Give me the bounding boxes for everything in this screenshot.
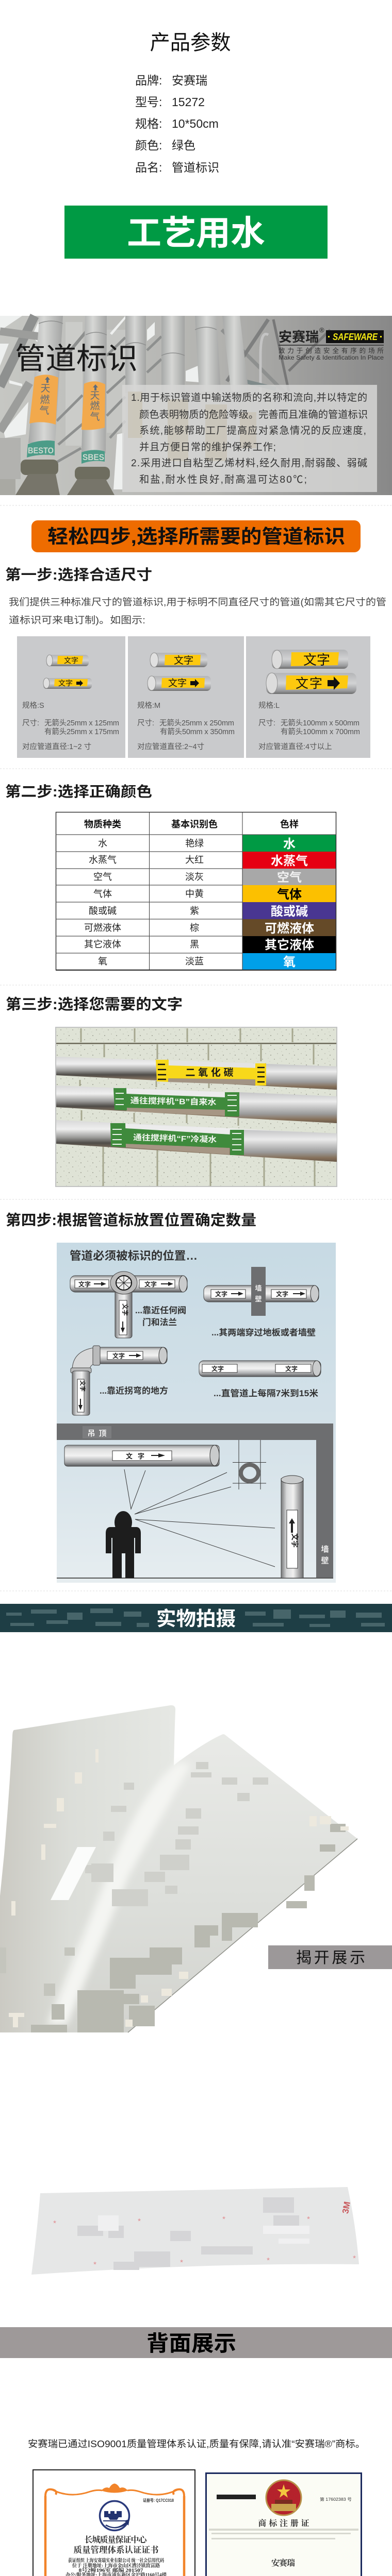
heading: product parameters: 产品参数 (150, 31, 231, 54)
section banner: back view: 背面展示 (146, 2331, 236, 2355)
valve pipe: 文字 (122, 1303, 129, 1316)
parameter list: 管道标识 (172, 161, 219, 174)
pipe M arrow (148, 676, 211, 691)
table header and rows: 紫 (190, 906, 199, 916)
panel: pipe marker banner photo: 燃 (40, 394, 50, 405)
size M specs: 尺寸: (137, 719, 154, 727)
parameter list: 颜色: (135, 139, 162, 152)
orange markers (29, 375, 105, 430)
size S specs: 有箭头25mm x 175mm (44, 727, 119, 736)
step 1 text (9, 597, 386, 625)
panel: pipe marker description: 1.用于标识管道中输送物质的名称和流向,并以特定的 (131, 392, 367, 403)
panel: size L (246, 636, 370, 758)
top pipe: 二氧化碳 (186, 1067, 233, 1078)
certificate body: 8号2幢196室 邮编 201507 (78, 2567, 143, 2573)
parameter list (135, 74, 219, 174)
pipe M plain: 文 字 (174, 655, 193, 666)
certificate body: 获证组织 上海安赛瑞实业有限公司 统一社会信用代码 (68, 2557, 164, 2564)
photo: label back: * (267, 2256, 270, 2265)
vertical pipe: 文字 (291, 1533, 299, 1548)
size L specs (258, 701, 360, 751)
parameter list: 型号: (135, 95, 162, 109)
panel: size M (128, 636, 244, 758)
pipe S arrow (43, 678, 92, 689)
trademark titles (258, 2518, 309, 2568)
photo: label back: * (93, 2260, 96, 2269)
size S specs: 无箭头25mm x 125mm (44, 718, 119, 727)
panel: pipe marker banner photo (0, 316, 392, 495)
photo: label back: * (53, 2219, 56, 2228)
swatch column: 水蒸气 (271, 854, 308, 868)
ceiling and wall frame (57, 1423, 333, 1579)
heading: step 3: 第三步:选择您需要的文字 (6, 996, 183, 1013)
ceiling and wall frame: 墙 (321, 1545, 329, 1554)
certificate number: 证册号: Q17CC018 (143, 2498, 174, 2503)
valve pipe: 文字 (78, 1280, 91, 1288)
certificate titles: 长城质量保证中心 (85, 2535, 148, 2545)
table header and rows: 水 (98, 838, 107, 849)
table header and rows: 水蒸气 (89, 855, 117, 865)
panel: pipe marker banner photo: 天 (90, 391, 100, 401)
certificate: ISO 9001 (33, 2470, 195, 2576)
table header and rows: 棕 (190, 923, 199, 933)
ceiling and wall frame: 吊 顶 (88, 1429, 106, 1438)
trademark titles: 安赛瑞 (271, 2558, 295, 2568)
table header and rows: 其它液体 (84, 939, 121, 950)
wall pipe (204, 1267, 319, 1316)
straight pipe: 文字 (211, 1365, 224, 1372)
bricks (80, 1028, 315, 1186)
vertical pipes (28, 316, 249, 453)
photo: label back: * (307, 2215, 310, 2224)
swatch column: 酸或碱 (271, 905, 308, 919)
photo: peeled label (0, 1705, 357, 2032)
brand logo: SAFEWARE: SAFEWARE (333, 332, 378, 342)
heading: four easy steps: 轻松四步,选择所需要的管道标识 (47, 526, 345, 547)
elbow pipe: 文字 (112, 1352, 125, 1360)
diagram: where pipes must be marked (57, 1243, 336, 1583)
sky gaps (0, 316, 206, 489)
certificate: trademark registration: 第 17602383 号 (320, 2497, 352, 2502)
panel: size S (17, 636, 125, 758)
lower pipe (56, 1120, 337, 1162)
brand logo: SAFEWARE: ® (319, 326, 324, 334)
middle pipe: 通往搅拌机“B”自来水 (130, 1095, 217, 1107)
straight pipe (199, 1361, 321, 1377)
struts (0, 316, 330, 462)
national emblem (266, 2480, 301, 2515)
pipe M arrow: 文 字 (168, 678, 187, 688)
camouflage print: lower, stronger (31, 1824, 346, 2032)
parameter list: 品牌: (135, 74, 162, 87)
table header and rows: 中黄 (185, 889, 204, 899)
sight lines (124, 1469, 275, 1567)
size S specs: 规格:S (22, 701, 44, 710)
valve pipe: 文字 (144, 1280, 157, 1288)
pipe L arrow: 文 字 (296, 676, 322, 691)
size S specs: 尺寸: (22, 719, 39, 727)
table header and rows: 空气 (93, 872, 112, 882)
pipe M plain (150, 653, 207, 667)
table header and rows (84, 819, 299, 967)
caption wall: ...其两端穿过地板或者墙壁 (211, 1327, 316, 1337)
table header and rows: 气体 (93, 889, 112, 899)
table header and rows: 淡蓝 (185, 956, 204, 967)
teal bands (27, 440, 105, 464)
photo: label back: 3M (340, 2201, 352, 2214)
swatch column (242, 835, 336, 970)
section banner: actual photos: 实物拍摄 (156, 1608, 236, 1630)
brand logo: SAFEWARE: Make Safety & Identification In Place (279, 354, 384, 361)
valve pipe (70, 1272, 187, 1338)
panel: pipe marker banner photo: 气 (39, 405, 50, 416)
parameter list: 安赛瑞 (172, 74, 207, 87)
fold highlight (47, 1762, 191, 2025)
size L specs: 有箭头100mm x 700mm (281, 727, 360, 736)
size L specs: 尺寸: (258, 719, 275, 727)
panel: pipe marker description: 系统,能够帮助工厂提高应对紧急情况的反应速度, (139, 425, 366, 436)
flanges (21, 460, 110, 480)
parameter list: 绿色 (172, 139, 195, 152)
table header and rows: 淡灰 (185, 872, 204, 882)
parameter list: 规格: (135, 117, 162, 130)
size S specs (22, 701, 119, 751)
heading: step 2: 第二步:选择正确颜色 (5, 784, 152, 800)
pipe S plain: 文 字 (64, 656, 78, 665)
photo: labelled pipes on brick wall (56, 1027, 337, 1187)
faint scope text (209, 2529, 358, 2539)
size S specs: 对应管道直径:1~2 寸 (22, 742, 91, 751)
size L specs: 对应管道直径:4寸以上 (258, 742, 332, 751)
table header and rows: 大红 (185, 855, 204, 865)
table header and rows: 可燃液体 (84, 923, 121, 933)
caption elbow: ...靠近拐弯的地方 (100, 1385, 168, 1396)
table header and rows: 色样 (280, 819, 299, 829)
certificate body (61, 2557, 167, 2576)
size M specs: 有箭头50mm x 350mm (160, 727, 235, 736)
pipe cross-section (233, 1440, 266, 1489)
swatch column: 其它液体 (265, 938, 314, 952)
size L specs: 规格:L (258, 701, 280, 710)
lower pipe: 通往搅拌机“F”冷凝水 (133, 1132, 217, 1144)
certifier logo (100, 2501, 129, 2531)
panel: pipe marker description: 并且方便日常的维护保养工作; (139, 442, 276, 453)
green product label: process water: 工艺用水 (127, 214, 265, 252)
top pipe (56, 1057, 337, 1090)
parameter list: 15272 (172, 95, 205, 109)
brand logo: SAFEWARE (279, 326, 384, 361)
elbow pipe (71, 1346, 167, 1415)
pipe S arrow: 文 字 (58, 679, 73, 687)
section banner: actual photos (0, 1604, 392, 1632)
table header and rows: 酸或碱 (89, 906, 117, 916)
wall pipe: 文字 (215, 1290, 227, 1298)
size L specs: 无箭头100mm x 500mm (281, 718, 360, 727)
camouflage print: upper, faint (85, 1762, 315, 1906)
straight pipe: 文字 (285, 1365, 298, 1372)
heading: step 1: 第一步:选择合适尺寸 (5, 567, 152, 583)
banner title: 管道标识 (15, 342, 138, 376)
swatch column: 气体 (277, 888, 302, 902)
parameter list: 10*50cm (172, 117, 219, 130)
panel: pipe marker banner photo: 气 (90, 411, 100, 422)
panel: pipe marker banner photo: 燃 (90, 400, 100, 412)
swatch column: 空气 (277, 871, 302, 885)
panel: pipe marker description: 2.采用进口自粘型乙烯材料,经久耐用,耐弱酸、弱碱 (131, 457, 367, 469)
parameter list: 品名: (135, 161, 162, 174)
certificate titles: 质量管理体系认证证书 (73, 2545, 159, 2555)
edge shadow (128, 1839, 357, 2032)
step 1 text: 道标识可来电订制)。如图示: (9, 615, 145, 625)
panel: pipe marker banner photo: SBES (83, 452, 104, 462)
swatch column: 可燃液体 (265, 922, 314, 936)
table header and rows: 黑 (190, 939, 199, 950)
panel: pipe marker banner photo: 天 (40, 383, 51, 394)
section banner: back view (0, 2327, 392, 2358)
wall pipe: 壁 (255, 1295, 262, 1303)
pipe S plain (46, 655, 89, 666)
wall pipe: 墙 (255, 1284, 262, 1292)
table header and rows: 物质种类 (84, 819, 121, 829)
green product label: process water (64, 206, 328, 259)
certificate titles (73, 2535, 159, 2555)
wall pipe: 文字 (276, 1290, 288, 1298)
glare (51, 1847, 96, 1900)
callout: peel-off view: 揭开展示 (296, 1950, 365, 1967)
ceiling pipe (64, 1445, 219, 1466)
size M specs (137, 701, 235, 751)
photo: label back (31, 2187, 359, 2275)
caption valve (135, 1306, 186, 1327)
trademark titles: 商标注册证 (258, 2518, 309, 2528)
table header and rows: 艳绿 (185, 838, 204, 849)
elbow pipe: 文字 (79, 1380, 87, 1392)
person silhouette (106, 1511, 141, 1578)
caption valve: ...靠近任何阀 (135, 1306, 186, 1315)
photo: label back: * (180, 2258, 183, 2267)
barcode (217, 2495, 256, 2499)
brand logo: SAFEWARE: 安赛瑞 (279, 329, 319, 345)
table header and rows: 氧 (98, 956, 107, 967)
pipe L arrow (266, 673, 356, 694)
pipe L plain (272, 650, 348, 669)
caption valve: 门和法兰 (142, 1317, 177, 1327)
grid (56, 812, 336, 970)
pipe L plain: 文 字 (303, 652, 330, 668)
table: colour chart (56, 812, 336, 970)
brand logo: SAFEWARE: 致力于创造安全有序的场所 (279, 347, 384, 354)
cream chips (9, 1749, 349, 2027)
diagram title: 管道必须被标识的位置… (70, 1249, 198, 1262)
certificate body: 位于 注册地址:上海市金山区漕泾镇致富路 (72, 2563, 160, 2569)
heading: step 4: 第四步:根据管道标放置位置确定数量 (6, 1212, 256, 1229)
ceiling and wall frame: 壁 (321, 1556, 329, 1565)
vertical pipe (281, 1476, 303, 1578)
panel: pipe marker banner photo: BESTO (28, 446, 54, 455)
panel: pipe marker description: 和盐,耐水性良好,耐高温可达80℃; (139, 474, 307, 485)
photo: label back: * (138, 2217, 141, 2226)
certification statement: 安赛瑞已通过ISO9001质量管理体系认证,质量有保障,请认准“安赛瑞®”商标。 (28, 2438, 365, 2449)
panel: pipe marker description (122, 385, 377, 492)
table header and rows: 基本识别色 (171, 819, 218, 829)
swatch column: 水 (283, 837, 296, 851)
photo: label back: * (353, 2254, 356, 2263)
step 1 text: 我们提供三种标准尺寸的管道标识,用于标明不同直径尺寸的管道(如需其它尺寸的管 (9, 597, 386, 607)
certificate: trademark registration (206, 2473, 361, 2576)
caption straight: ...直管道上每隔7米到15米 (214, 1388, 319, 1398)
callout: peel-off view (268, 1945, 392, 1969)
ceiling pipe: 文 字 (126, 1452, 144, 1460)
orange ornamental frame (45, 2484, 184, 2576)
size M specs: 无箭头25mm x 250mm (159, 718, 234, 727)
photo: label back: * (222, 2215, 225, 2224)
size M specs: 对应管道直径:2~4寸 (137, 742, 204, 751)
panel: pipe marker description: 颜色表明物质的危险等级。完善而且准确的管道标识 (139, 409, 368, 420)
heading: four easy steps (31, 520, 361, 552)
swatch column: 氧 (283, 955, 296, 969)
middle pipe (56, 1086, 337, 1123)
size M specs: 规格:M (137, 701, 160, 710)
